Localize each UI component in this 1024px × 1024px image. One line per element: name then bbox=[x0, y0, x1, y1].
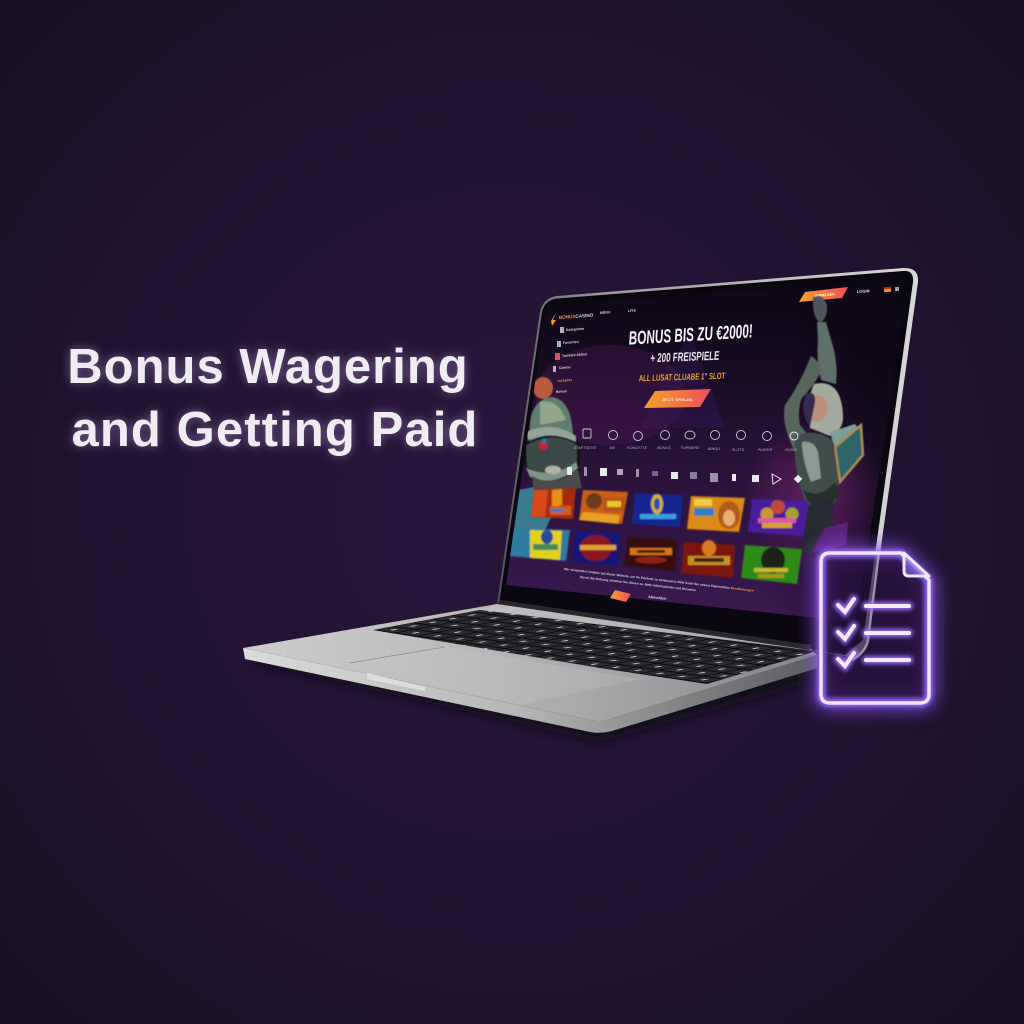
category labels: STARTSEITE bbox=[573, 446, 597, 450]
category labels: GUIDE bbox=[785, 448, 797, 452]
site header: MENU bbox=[600, 310, 611, 315]
game 4 bbox=[687, 496, 745, 532]
folded corner bbox=[904, 553, 929, 576]
title bbox=[67, 340, 478, 457]
sidebar menu: Jackpots bbox=[557, 378, 572, 383]
game thumbnails row 2 bbox=[508, 528, 802, 584]
site header: ANMELDEN bbox=[815, 292, 835, 298]
category labels: 360 bbox=[609, 446, 616, 450]
infographic canvas bbox=[62, 104, 954, 920]
category labels: BONUS bbox=[657, 446, 671, 450]
category labels: TURNIERE bbox=[680, 446, 700, 450]
game thumbnails row 1 bbox=[531, 488, 809, 536]
game 10 bbox=[741, 545, 802, 584]
laptop bbox=[243, 268, 918, 742]
side ports bbox=[783, 670, 811, 682]
document body bbox=[821, 553, 929, 703]
game 1 bbox=[531, 488, 576, 519]
outer glow bbox=[821, 553, 929, 703]
category labels: ROULETTE bbox=[627, 446, 648, 450]
laptop lid bbox=[497, 268, 918, 658]
game 7 bbox=[572, 531, 620, 566]
game 3 bbox=[632, 493, 683, 527]
site header: LOGIN bbox=[857, 288, 870, 294]
title: and Getting Paid bbox=[72, 403, 478, 457]
category labels: BINGO bbox=[708, 447, 720, 451]
sidebar menu: Turniere Aktion bbox=[562, 352, 587, 358]
cta button: JETZT SPIELEN bbox=[662, 397, 692, 402]
title: Bonus Wagering bbox=[67, 340, 469, 394]
footer copy: Durch die Nutzung stimmen Sie diesen zu. Mehr Informationen und Hinweise bbox=[580, 575, 696, 592]
site header: LIVE bbox=[628, 308, 637, 313]
lid edge visible through document bbox=[852, 552, 879, 660]
game 8 bbox=[624, 537, 677, 571]
check marks and list lines bbox=[838, 599, 909, 666]
hero text bbox=[628, 322, 753, 384]
game 5 bbox=[748, 499, 809, 536]
category labels: SLOTS bbox=[732, 448, 745, 452]
sub headline: + 200 FREISPIELE bbox=[650, 350, 720, 366]
footer buttons bbox=[610, 590, 667, 602]
headline: BONUS BIS ZU €2000! bbox=[628, 322, 753, 349]
sidebar menu: Kategorien bbox=[566, 327, 584, 332]
right hero character bbox=[784, 296, 863, 554]
site header: BONUSCASINO bbox=[559, 313, 594, 320]
footer copy: Wir verwenden Cookies auf dieser Website, um Ihr Erlebnis zu verbessern. Bitte lesen Sie unsere Datenschutz Bestimmungen bbox=[564, 567, 754, 593]
category icons row bbox=[583, 429, 798, 440]
keyboard bbox=[373, 610, 817, 684]
front notch bbox=[367, 673, 425, 691]
icon: checklist document bbox=[821, 552, 929, 703]
check marks glow bbox=[838, 599, 909, 666]
game 9 bbox=[681, 540, 735, 578]
title: and Getting Paid bbox=[72, 403, 478, 457]
sidebar menu: Favoriten bbox=[563, 340, 579, 345]
category labels bbox=[574, 446, 797, 451]
trackpad bbox=[349, 647, 640, 705]
sidebar menu: Bonus bbox=[556, 389, 567, 394]
game 6 bbox=[508, 528, 570, 561]
site header bbox=[551, 287, 899, 326]
cta button bbox=[644, 389, 711, 408]
category labels: PLAYER bbox=[758, 448, 773, 452]
sidebar menu bbox=[553, 327, 587, 394]
laptop shadow bbox=[250, 620, 820, 742]
document outline bbox=[821, 553, 929, 703]
provider icons row bbox=[567, 467, 802, 484]
title: Bonus Wagering bbox=[67, 340, 469, 394]
screen content bbox=[506, 286, 899, 621]
tagline: ALL LUSAT CLUABE 1" SLOT bbox=[638, 371, 726, 384]
laptop deck bbox=[243, 600, 830, 733]
sidebar menu: Casino bbox=[559, 365, 571, 370]
left robot character bbox=[510, 377, 582, 556]
footer buttons: Abmelden bbox=[648, 595, 667, 601]
game 2 bbox=[579, 490, 628, 524]
